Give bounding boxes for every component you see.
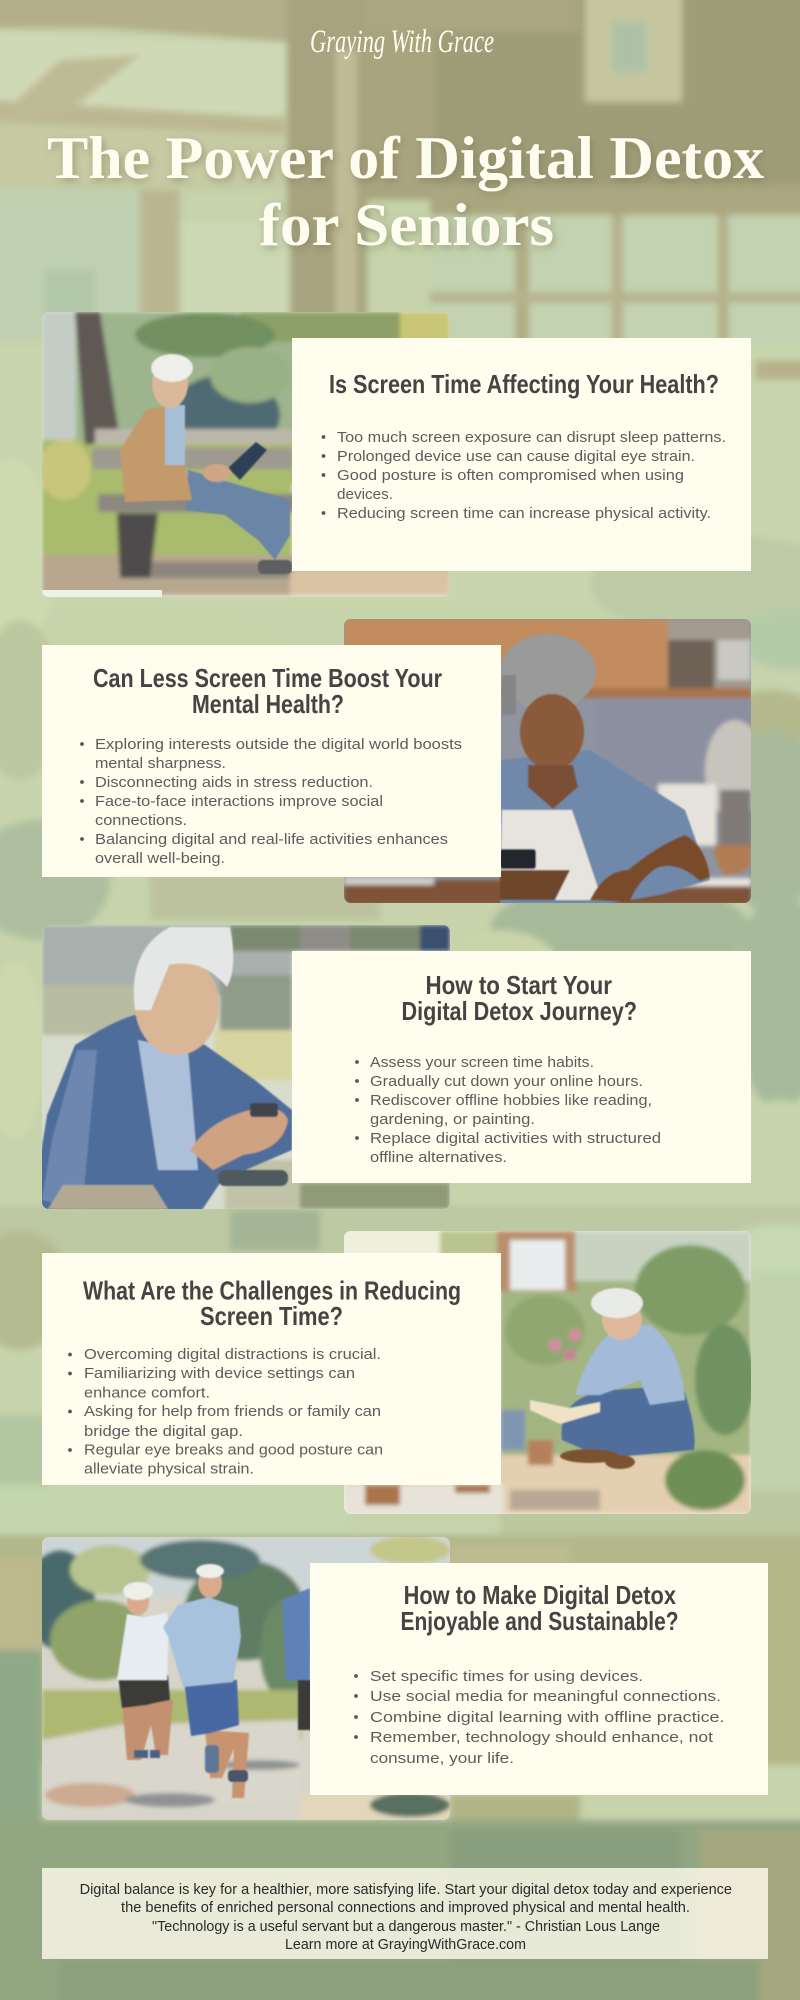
- title: [47, 125, 764, 258]
- bullet list: Rediscover offline hobbies like reading,: [370, 1093, 652, 1109]
- image: senior man looking at phone: [32, 925, 450, 1210]
- card: [292, 338, 751, 571]
- heading: [402, 970, 637, 1026]
- heading: Digital Detox Journey?: [402, 996, 637, 1026]
- bullet list: Use social media for meaningful connections.: [370, 1689, 721, 1705]
- logo: Graying With Grace: Graying With Grace: [310, 24, 494, 60]
- footer panel: call to action: "Technology is a useful servant but a dangerous master." - Christian Lous Lange: [152, 1919, 660, 1935]
- bullet list: Balancing digital and real-life activities enhances: [95, 832, 448, 848]
- panel 1: Is Screen Time Affecting Your Health?: [39, 312, 751, 600]
- card: [42, 645, 501, 877]
- bullet list: Familiarizing with device settings can: [84, 1366, 355, 1382]
- bullet list: offline alternatives.: [370, 1150, 507, 1166]
- bullet list: Exploring interests outside the digital world boosts: [95, 737, 462, 753]
- bullet list: gardening, or painting.: [370, 1112, 535, 1128]
- bullet list: Assess your screen time habits.: [370, 1055, 594, 1071]
- bullet list: [68, 1347, 383, 1478]
- heading: What Are the Challenges in Reducing: [83, 1276, 461, 1306]
- bullet list: [355, 1055, 661, 1166]
- heading: [93, 663, 442, 719]
- card: [310, 1563, 768, 1795]
- image: senior woman in kitchen with phone: [344, 619, 765, 905]
- title: for Seniors: [259, 192, 554, 258]
- heading: [400, 1580, 678, 1636]
- bullet list: Set specific times for using devices.: [370, 1669, 643, 1685]
- footer panel: call to action: the benefits of enriched personal connections and improved physical and mental health.: [121, 1900, 690, 1916]
- image: three seniors jogging on path: [25, 1536, 450, 1820]
- image: senior woman reading among plants: [344, 1231, 755, 1515]
- bullet list: Reducing screen time can increase physical activity.: [337, 506, 711, 522]
- footer panel: call to action: Digital balance is key for a healthier, more satisfying life. Start your digital detox today and experience: [80, 1882, 732, 1898]
- panel 3: How to Start Your Digital Detox Journey?: [32, 925, 751, 1210]
- bullet list: Overcoming digital distractions is crucial.: [84, 1347, 381, 1363]
- bullet list: mental sharpness.: [95, 756, 226, 772]
- bullet list: devices.: [337, 487, 393, 503]
- bullet list: Remember, technology should enhance, not: [370, 1730, 713, 1746]
- footer panel: call to action: Learn more at GrayingWithGrace.com: [285, 1937, 526, 1953]
- bullet list: Combine digital learning with offline practice.: [370, 1710, 724, 1726]
- card: [292, 951, 751, 1183]
- bullet list: [80, 737, 462, 867]
- bullet list: connections.: [95, 813, 187, 829]
- bullet list: overall well-being.: [95, 851, 225, 867]
- bullet list: Regular eye breaks and good posture can: [84, 1442, 383, 1458]
- bullet list: Replace digital activities with structured: [370, 1131, 661, 1147]
- image: senior reading tablet on park bench: [39, 312, 450, 600]
- title: The Power of Digital Detox: [47, 125, 764, 191]
- heading: Mental Health?: [192, 689, 344, 719]
- heading: Screen Time?: [200, 1301, 343, 1331]
- panel 2: Can Less Screen Time Boost Your Mental Health?: [42, 619, 765, 905]
- bullet list: Face-to-face interactions improve social: [95, 794, 383, 810]
- bullet list: Disconnecting aids in stress reduction.: [95, 775, 373, 791]
- bullet list: consume, your life.: [370, 1751, 514, 1767]
- bullet list: Gradually cut down your online hours.: [370, 1074, 643, 1090]
- heading: How to Start Your: [426, 970, 612, 1000]
- bullet list: bridge the digital gap.: [84, 1424, 243, 1440]
- bullet list: Too much screen exposure can disrupt sleep patterns.: [337, 430, 726, 446]
- heading: How to Make Digital Detox: [404, 1580, 676, 1610]
- heading: Can Less Screen Time Boost Your: [93, 663, 442, 693]
- bullet list: alleviate physical strain.: [84, 1462, 254, 1478]
- panel 4: What Are the Challenges in Reducing Screen Time?: [42, 1231, 755, 1515]
- bullet list: enhance comfort.: [84, 1386, 210, 1402]
- bullet list: Asking for help from friends or family can: [84, 1404, 381, 1420]
- heading: Enjoyable and Sustainable?: [400, 1606, 678, 1636]
- bullet list: Prolonged device use can cause digital eye strain.: [337, 449, 695, 465]
- bullet list: [322, 430, 726, 522]
- bullet list: Good posture is often compromised when using: [337, 468, 684, 484]
- card: [42, 1253, 501, 1485]
- bullet list: [354, 1669, 724, 1767]
- footer panel: call to action: [42, 1868, 768, 1959]
- heading: Is Screen Time Affecting Your Health?: [329, 369, 719, 399]
- panel 5: How to Make Digital Detox Enjoyable and Sustainable?: [25, 1536, 768, 1820]
- heading: [83, 1276, 461, 1331]
